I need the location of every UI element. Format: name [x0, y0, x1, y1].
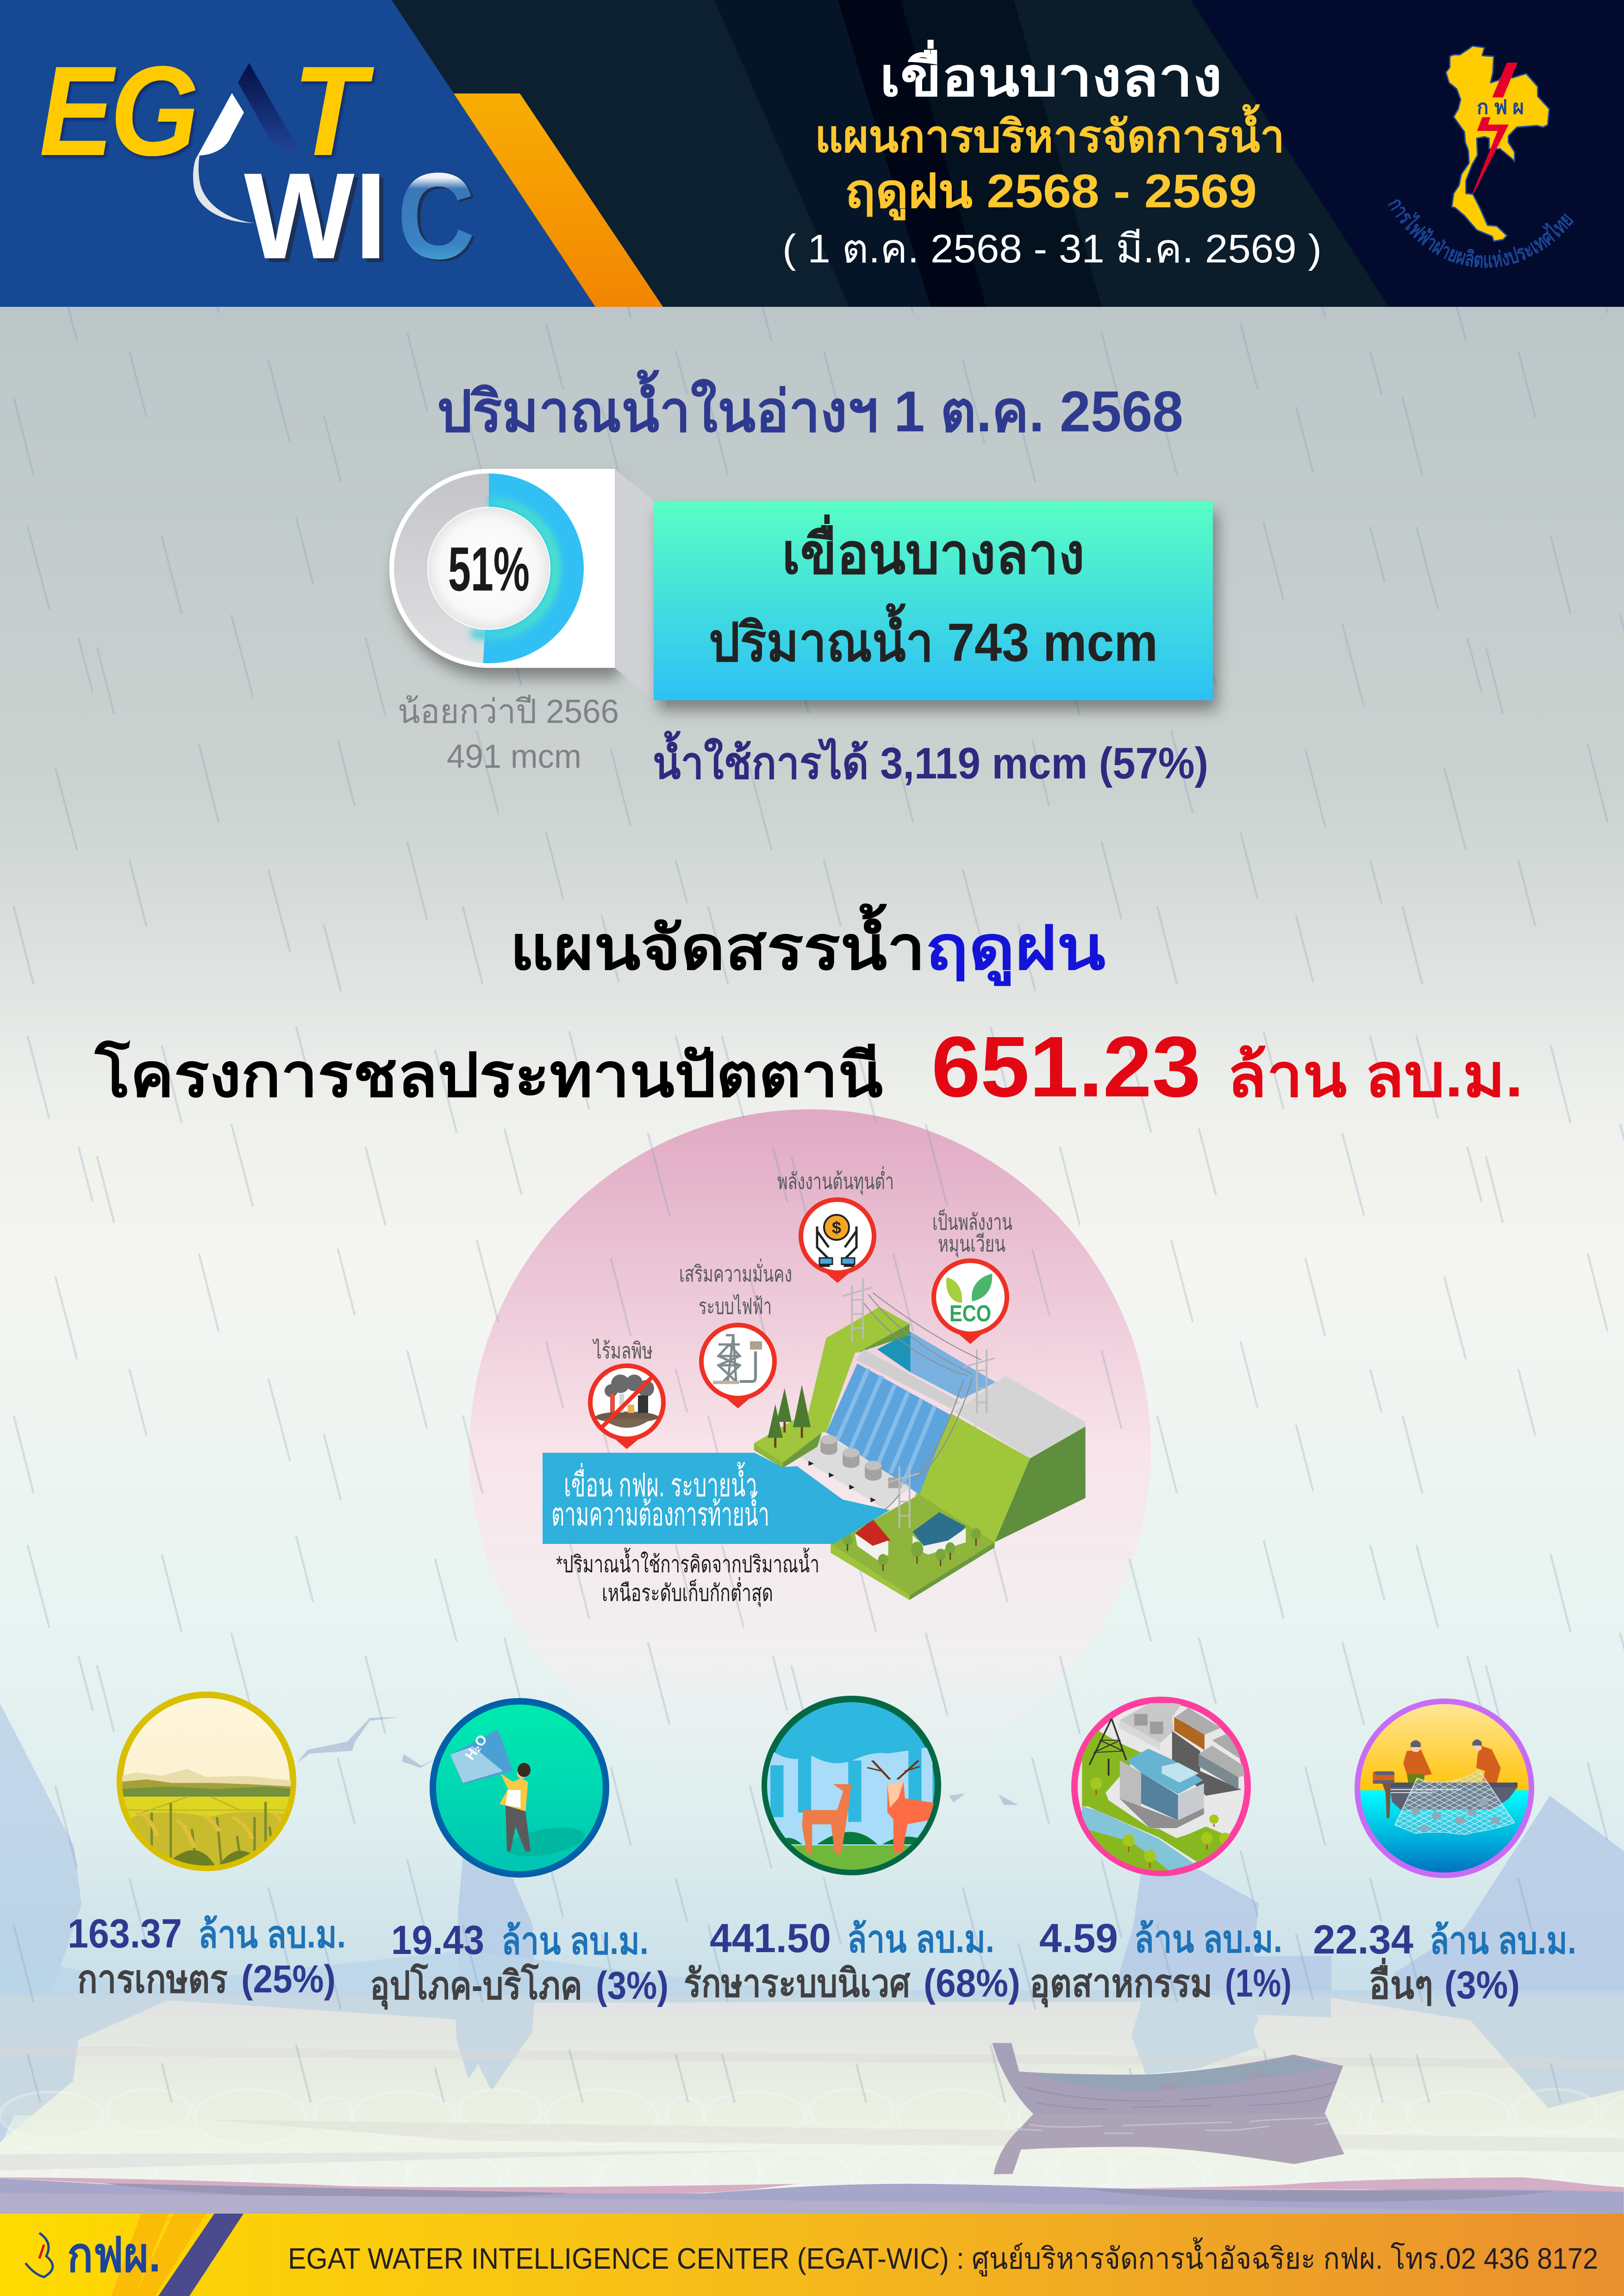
logo: EGAT Thailand map [1384, 46, 1578, 272]
title: แผนการบริหารจัดการน้ำ [815, 104, 1285, 162]
category: industry: 4.59 [1039, 1915, 1118, 1961]
pin: renewable energy: หมุนเวียน [938, 1232, 1006, 1257]
water shore waves [0, 2178, 1624, 2214]
text: less than year 2566: 491 mcm [447, 738, 581, 775]
category: consumption [370, 1701, 668, 2010]
category: industry: (1%) [1225, 1961, 1292, 2005]
title: ฤดูฝน 2568 - 2569 [845, 165, 1257, 221]
category: ecosystem [684, 1699, 1020, 2005]
heading: Pattani irrigation total: 651.23 [931, 1019, 1201, 1115]
panel: dam volume box: ปริมาณน้ำ 743 mcm [709, 603, 1158, 672]
footer logo [25, 2228, 161, 2282]
banner: EGAT dam release [543, 1453, 890, 1544]
gauge arc 51% [411, 491, 567, 646]
heading: rainy season allocation [510, 903, 1106, 986]
category: consumption: (3%) [596, 1964, 668, 2007]
category: agriculture [68, 1695, 346, 2001]
category: agriculture: (25%) [241, 1957, 336, 2001]
category: consumption: อุปโภค-บริโภค [370, 1963, 582, 2010]
boat with reflection [993, 2043, 1344, 2174]
title: เขื่อนบางลาง [880, 40, 1222, 107]
heading: rainy season allocation: ฤดูฝน [925, 914, 1106, 986]
gauge value: 51% [448, 534, 530, 604]
panel: donut gauge [389, 469, 654, 700]
heading: rainy season allocation: แผนจัดสรรน้ำ [510, 903, 925, 982]
text: less than year 2566: น้อยกว่าปี 2566 [398, 693, 619, 730]
panel: pink reservoir circle [469, 1109, 1151, 1791]
logo: WIC [244, 148, 477, 288]
background mountains [0, 1703, 1624, 2203]
rain streaks [0, 307, 1624, 2103]
bird silhouettes [297, 1717, 1018, 1805]
pin: low cost energy: $ [832, 1218, 841, 1237]
icon: fishermen with net [1354, 1702, 1537, 1875]
category: industry: อุตสาหกรรม [1030, 1961, 1212, 2008]
panel: dam volume box: เขื่อนบางลาง [782, 514, 1085, 585]
heading: Pattani irrigation total: ล้าน ลบ.ม. [1227, 1042, 1523, 1109]
category: industry [1030, 1700, 1292, 2008]
text: less than year 2566 [398, 693, 619, 775]
category: ecosystem: 441.50 [710, 1915, 831, 1961]
pin: low cost energy [777, 1166, 894, 1283]
header band [0, 0, 1624, 307]
heading: Pattani irrigation total [94, 1019, 1523, 1115]
title [782, 40, 1322, 271]
pin: renewable energy [932, 1209, 1012, 1344]
footnote: *ปริมาณน้ำใช้การคิดจากปริมาณน้ำ [556, 1548, 819, 1577]
pin: power system security: ระบบไฟฟ้า [699, 1294, 772, 1319]
footer logo: กฟผ. [67, 2228, 161, 2282]
logo: WIC: WI [248, 151, 391, 288]
logo: WIC: C [397, 148, 475, 285]
logo: EGAT: G [110, 40, 199, 182]
logo: EGAT Thailand map: กฟผ [1477, 96, 1524, 118]
text: usable water: น้ำใช้การได้ 3,119 mcm (57%) [653, 730, 1208, 788]
banner: EGAT dam release: ตามความต้องการท้ายน้ำ [551, 1491, 769, 1532]
pin: renewable energy: ECO [949, 1300, 991, 1326]
panel: dam volume box [654, 501, 1213, 700]
category: agriculture: ล้าน ลบ.ม. [198, 1914, 346, 1956]
pin: no pollution: ไร้มลพิษ [592, 1338, 653, 1363]
category: ecosystem: รักษาระบบนิเวศ [684, 1961, 911, 2005]
logo: EGAT: E [39, 40, 118, 182]
category: others: ล้าน ลบ.ม. [1430, 1920, 1576, 1962]
orange diagonal bar [454, 93, 663, 307]
category: agriculture: การเกษตร [77, 1957, 228, 2001]
title: ( 1 ต.ค. 2568 - 31 มี.ค. 2569 ) [782, 227, 1322, 271]
icon: rice field [120, 1695, 293, 1874]
blue logo panel [0, 0, 595, 307]
connector side [615, 469, 654, 700]
category: ecosystem: ล้าน ลบ.ม. [847, 1918, 994, 1960]
pin: renewable energy: เป็นพลังงาน [932, 1209, 1012, 1235]
icon: industrial buildings [1074, 1700, 1248, 1873]
pin: no pollution [590, 1338, 663, 1449]
category: consumption: ล้าน ลบ.ม. [501, 1920, 649, 1962]
heading: Pattani irrigation total: โครงการชลประทานปัตตานี [94, 1040, 883, 1109]
logo: WIC: C [401, 149, 477, 286]
heading: water in reservoir: ปริมาณน้ำในอ่างฯ 1 ต.ค. 2568 [437, 369, 1183, 444]
pin: power system security [679, 1258, 792, 1408]
dam illustration [754, 1278, 1086, 1600]
icon: deer in forest [765, 1699, 943, 1879]
banner: EGAT dam release: เขื่อน กฟผ. ระบายน้ำ [564, 1462, 757, 1503]
logo: EGAT [39, 40, 375, 223]
pin: low cost energy: พลังงานต้นทุนต่ำ [777, 1166, 894, 1195]
category: others: 22.34 [1313, 1916, 1413, 1962]
footer band [0, 2214, 1624, 2296]
category: agriculture: 163.37 [68, 1910, 182, 1956]
category: others [1313, 1702, 1576, 2007]
logo: EGAT Thailand map: การไฟฟ้าฝ่ายผลิตแห่งประเทศไทย [1384, 193, 1578, 272]
logo: EGAT: T [293, 40, 375, 182]
category: others: อื่นๆ [1369, 1958, 1433, 2007]
category: industry: ล้าน ลบ.ม. [1134, 1918, 1282, 1960]
logo: WIC: WI [244, 148, 387, 285]
footnote [556, 1548, 819, 1607]
pin: power system security: เสริมความมั่นคง [679, 1258, 792, 1287]
cell water texture [0, 2083, 1624, 2203]
icon: person with water bag: H₂O [462, 1732, 490, 1763]
category: consumption: 19.43 [391, 1917, 484, 1963]
category: ecosystem: (68%) [924, 1961, 1020, 2005]
category: others: (3%) [1444, 1963, 1520, 2007]
icon: person with water bag [433, 1701, 606, 1874]
footnote: เหนือระดับเก็บกักต่ำสุด [602, 1577, 773, 1607]
